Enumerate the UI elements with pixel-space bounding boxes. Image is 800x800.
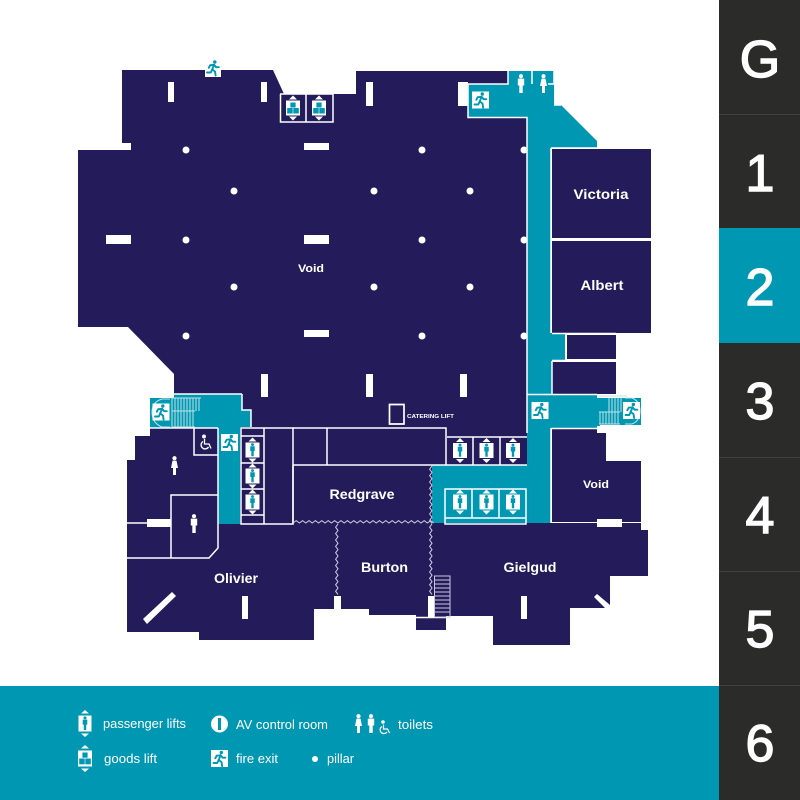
east rooms: Victoria block [552, 149, 651, 238]
floor 4 [719, 487, 800, 572]
icon: fire exit north on white [207, 60, 219, 76]
icon: toilets west female [171, 456, 178, 475]
icon: toilets north male [518, 74, 524, 93]
legend icon: fire exit [211, 750, 228, 767]
floor G [719, 31, 800, 114]
legend text: goods lift: goods lift [104, 752, 158, 766]
legend text: pillar: pillar [327, 752, 354, 766]
floor 6: 6 [746, 715, 774, 773]
east small rooms [552, 335, 616, 394]
legend icon: toilets [355, 714, 390, 734]
floor 4: 4 [746, 487, 774, 545]
floor 2 active: 2 [746, 259, 774, 317]
stairs: south [434, 576, 450, 617]
east rooms: Albert block [552, 241, 651, 333]
legend icon: pillar [312, 756, 318, 762]
panel: legend [0, 686, 719, 800]
label: Void: Void [298, 263, 324, 275]
legend icon: goods lift [78, 745, 92, 772]
east void room [552, 429, 641, 522]
stairs: west [152, 398, 201, 427]
floor G: G [740, 31, 780, 89]
label: Albert: Albert [580, 277, 624, 293]
icon: fire exit east stairs [623, 402, 640, 419]
icon: fire exit corridor east [532, 402, 548, 419]
floor 5 [719, 601, 800, 686]
floor 5: 5 [746, 601, 774, 659]
white structural blocks [106, 82, 622, 624]
icons: goods lifts [286, 96, 326, 120]
legend text: toilets: toilets [398, 718, 433, 732]
icon: accessible toilet [201, 435, 211, 449]
icons: passenger lifts lower row [453, 490, 520, 514]
floor selector [719, 0, 800, 800]
label: Victoria: Victoria [574, 186, 629, 202]
legend icon: passenger lifts [78, 710, 92, 737]
floor 3 [719, 373, 800, 458]
label: Burton: Burton [361, 559, 408, 575]
floor 3: 3 [746, 373, 774, 431]
icon: toilets west male [191, 514, 197, 533]
label: Gielgud: Gielgud [504, 559, 556, 575]
icon: fire exit west stairs [152, 404, 170, 420]
legend icon: AV control room [211, 716, 228, 732]
room walls [127, 71, 651, 618]
floor 2 active [719, 228, 800, 343]
stairs: east [597, 396, 640, 424]
icon: fire exit corridor west [221, 434, 238, 451]
legend text: AV control room: AV control room [236, 718, 328, 732]
teal corridor: west [150, 394, 251, 524]
partition walls [293, 466, 434, 594]
icons: passenger lifts upper row [453, 438, 520, 463]
legend text: passenger lifts: passenger lifts [103, 717, 186, 731]
icon: toilets north female [540, 74, 547, 93]
label: Olivier: Olivier [214, 570, 259, 586]
pillars [182, 146, 528, 340]
floor 1: 1 [746, 145, 774, 203]
teal corridor: north and east [432, 71, 641, 523]
legend background [0, 686, 719, 800]
label: Void east: Void [583, 479, 609, 491]
icons: passenger lifts west column [246, 438, 260, 514]
floor plan [78, 60, 651, 645]
icon: fire exit north-east [472, 92, 489, 108]
building silhouette [78, 70, 648, 645]
legend text: fire exit: fire exit [236, 752, 279, 766]
floor selector background [719, 0, 800, 800]
label: Redgrave: Redgrave [330, 486, 395, 502]
label: catering lift: CATERING LIFT [407, 414, 455, 420]
